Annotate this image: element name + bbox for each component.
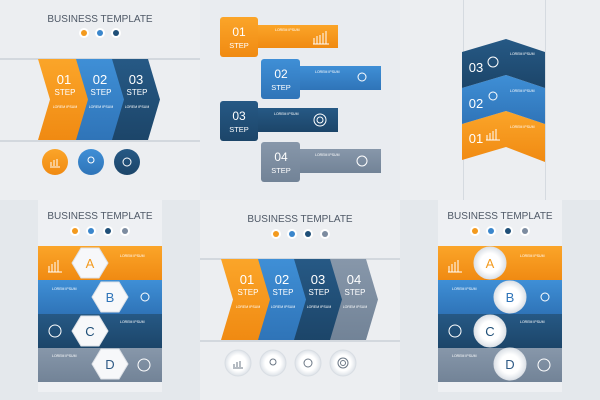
chevron 01: 01 [240,272,254,287]
panel: step boxes [200,0,400,200]
hexagons: A [86,256,95,271]
chevron 02: 02 [93,72,107,87]
chevron 01: 01 [57,72,71,87]
bands [38,246,162,382]
pie dots [70,226,130,236]
circles: B [506,290,514,305]
chevron 01: LOREM IPSUM [53,105,77,109]
step 04 [261,142,381,182]
chevron 04: LOREM IPSUM [343,305,367,309]
chevron 03: STEP [127,88,147,97]
pie dots [79,28,121,38]
chevron 02: STEP [91,88,111,97]
step 01: 01 [232,25,246,39]
bands: LOREM IPSUM [452,287,477,291]
chevron 01: STEP [55,88,75,97]
step 02 [261,59,381,99]
hexagons [72,248,128,379]
hexagons: C [85,324,95,339]
panel: vertical stacked chevrons [400,0,600,200]
title: BUSINESS TEMPLATE [47,14,153,25]
chevron 04: 04 [347,272,361,287]
circles [474,247,526,380]
band 01: 01 [469,131,483,146]
icon circles [42,149,140,175]
chevron 02: LOREM IPSUM [271,305,295,309]
chevron 02: 02 [275,272,289,287]
step 02: LOREM IPSUM [315,70,340,74]
bands: LOREM IPSUM [120,254,145,258]
pie dots [470,226,530,236]
bands: LOREM IPSUM [52,354,77,358]
step 02: 02 [274,67,288,81]
title: BUSINESS TEMPLATE [447,211,553,222]
chevron 03 [110,59,160,140]
step 04: STEP [271,166,291,175]
chevron 03: LOREM IPSUM [307,305,331,309]
bands: LOREM IPSUM [52,287,77,291]
hexagons: B [106,290,114,305]
step 02: STEP [271,83,291,92]
step 03 [220,101,338,141]
chevron 02 [74,59,124,140]
chevron 03: LOREM IPSUM [125,105,149,109]
chevron 03: 03 [129,72,143,87]
band 03: LOREM IPSUM [510,52,535,56]
chevron 04: STEP [345,288,365,297]
step 03: 03 [232,109,246,123]
step 03: STEP [229,125,249,134]
band 02 [462,75,545,124]
chevron 01 [221,259,270,340]
bands: LOREM IPSUM [520,254,545,258]
circles: C [485,324,495,339]
band 03 [462,39,545,88]
band 03: 03 [469,60,483,75]
bands [438,246,562,382]
step 04: 04 [274,150,288,164]
chevron 03 [293,259,342,340]
step 01 [220,17,338,57]
step 01: LOREM IPSUM [275,28,300,32]
chevron 02 [257,259,306,340]
chevron 04 [329,259,378,340]
band 01: LOREM IPSUM [510,125,535,129]
panel: circle ABCD [400,200,600,400]
bands: LOREM IPSUM [520,320,545,324]
panel: four-step chevrons [200,200,400,400]
band 01 [462,111,545,162]
chevron 02: STEP [273,288,293,297]
title: BUSINESS TEMPLATE [47,211,153,222]
panel: three-step chevrons [0,0,200,200]
hexagons: D [105,357,115,372]
chevron 02: LOREM IPSUM [89,105,113,109]
panel: hexagon ABCD [0,200,200,400]
circles: D [505,357,515,372]
chevron 03: 03 [311,272,325,287]
circles: A [486,256,495,271]
band 02: LOREM IPSUM [510,89,535,93]
pie dots [271,229,330,239]
title: BUSINESS TEMPLATE [247,214,353,225]
icon circles [225,350,356,376]
chevron 01: STEP [238,288,258,297]
step 01: STEP [229,41,249,50]
step 04: LOREM IPSUM [315,153,340,157]
step 03: LOREM IPSUM [274,112,299,116]
band 02: 02 [469,96,483,111]
bands: LOREM IPSUM [452,354,477,358]
chevron 01: LOREM IPSUM [236,305,260,309]
bands: LOREM IPSUM [120,320,145,324]
chevron 03: STEP [309,288,329,297]
chevron 01 [38,59,88,140]
